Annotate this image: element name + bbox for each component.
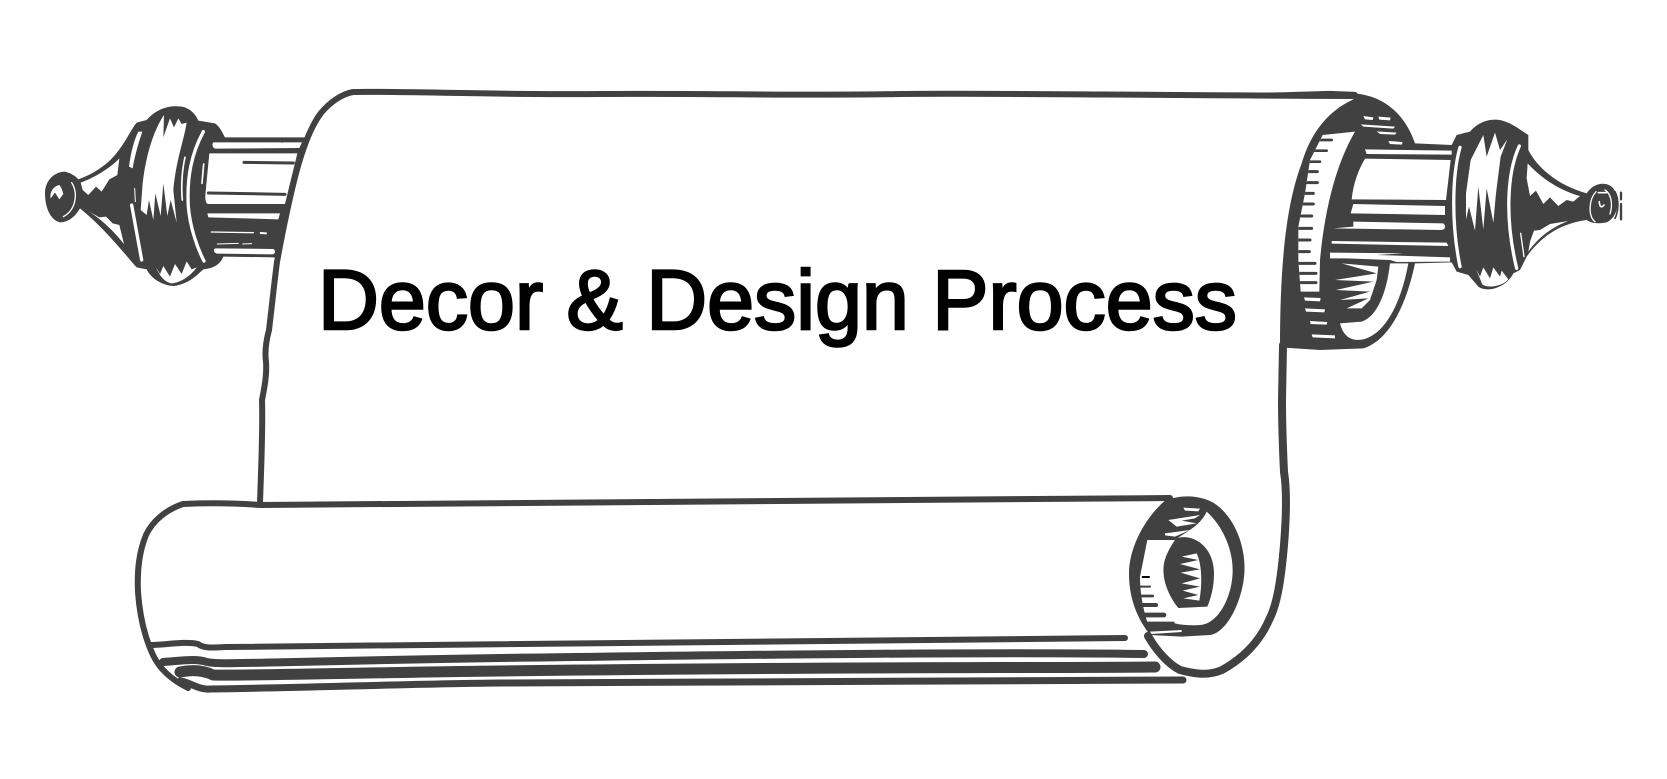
scroll illustration (45, 92, 1621, 689)
title: Decor & Design Process (318, 253, 1237, 347)
infographic: scroll with title (45, 88, 1622, 693)
small roll end (1129, 496, 1245, 637)
lower roll (138, 498, 1183, 689)
left knob and rod (45, 106, 305, 286)
clipped artifact at right of ball (1615, 192, 1621, 219)
sheet outline (260, 92, 1352, 674)
comb teeth (1293, 140, 1332, 283)
right knob, rod and rolled sheet (1230, 93, 1621, 350)
